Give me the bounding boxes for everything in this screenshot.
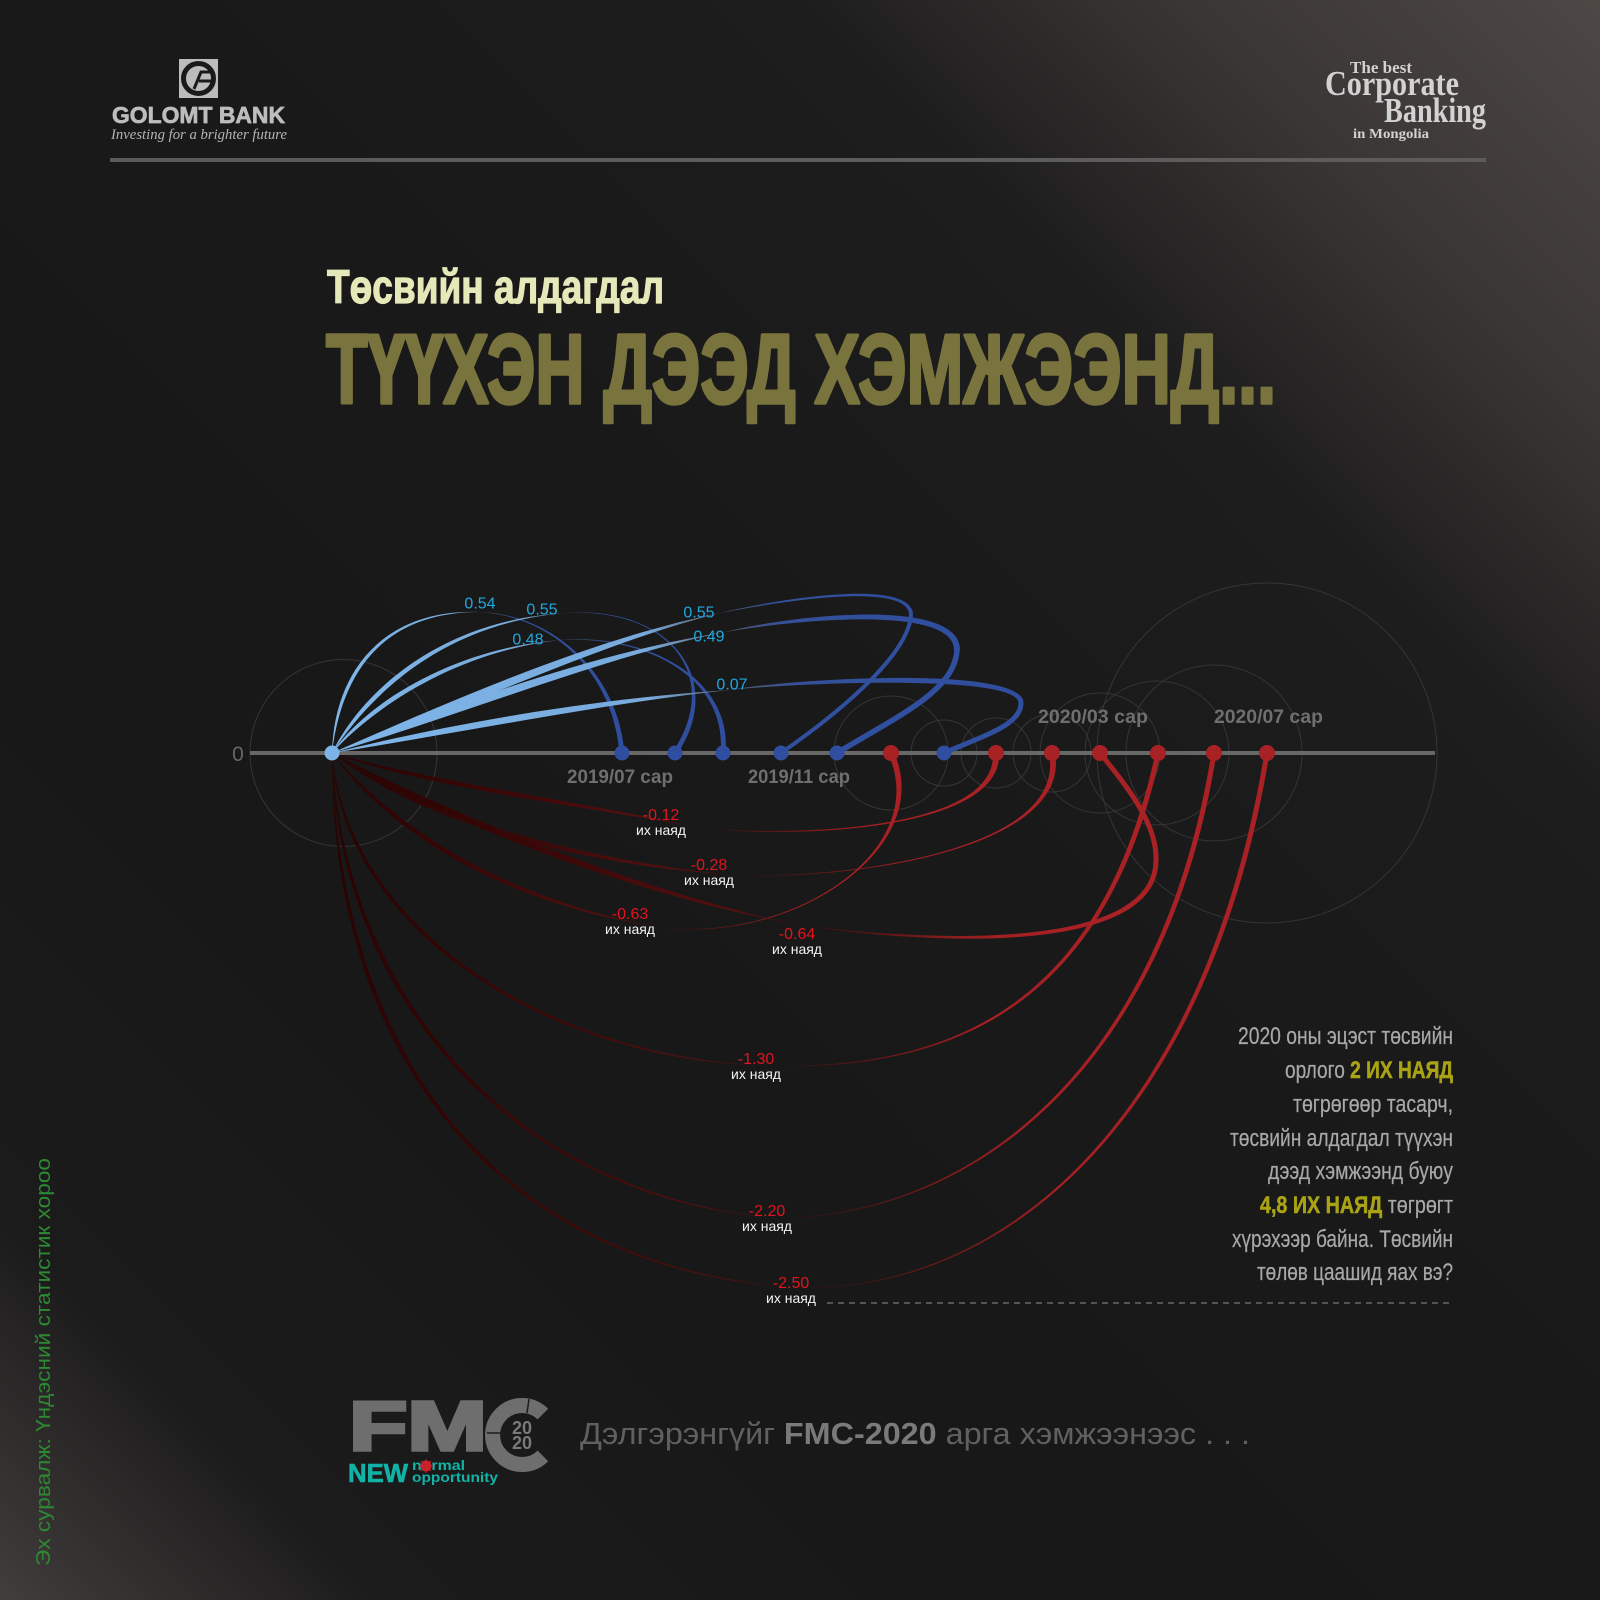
deficit value labels: -0.12	[643, 807, 679, 824]
subtitle: Төсвийн алдагдал	[327, 260, 664, 313]
deficit value labels: -0.63	[612, 906, 648, 923]
logo: FMC 2020	[348, 1387, 543, 1488]
deficit value labels: -0.64	[779, 926, 815, 943]
deficit month dots	[883, 745, 1275, 761]
deficit value labels: их наяд	[742, 1218, 792, 1234]
surplus value labels: 0.49	[693, 628, 725, 646]
date labels: 2020/07 сар	[1214, 707, 1323, 728]
date labels: 2019/11 сар	[748, 767, 850, 788]
origin dot	[324, 746, 340, 760]
commentary text block: төгрөгөөр тасарч,	[1293, 1091, 1453, 1118]
red arc -2.50	[332, 753, 1270, 1288]
red arc -0.12	[332, 753, 999, 832]
red arc -1.30	[332, 752, 1160, 1066]
year digits	[512, 1418, 532, 1453]
icon: Golomt G mark	[179, 59, 218, 98]
blue arc 0.54	[332, 612, 624, 753]
red arc -0.63	[332, 752, 902, 929]
logo: best corporate banking award: The best	[1350, 58, 1412, 77]
red arc -0.28	[332, 752, 1056, 876]
FM lettering: FM	[349, 1387, 487, 1465]
deficit value labels: их наяд	[772, 941, 822, 957]
deficit value labels: их наяд	[731, 1066, 781, 1082]
year digits: 20	[512, 1433, 532, 1453]
commentary text block	[1230, 1023, 1453, 1286]
date labels: 2019/07 сар	[567, 767, 673, 788]
deficit value labels	[605, 807, 822, 1306]
logo: best corporate banking award: Banking	[1384, 91, 1486, 130]
icon: C ring	[487, 1399, 543, 1464]
commentary text block: орлого 2 ИХ НАЯД	[1285, 1057, 1453, 1084]
red arc -2.20	[332, 753, 1216, 1218]
logo: best corporate banking award: in Mongolia	[1353, 126, 1429, 141]
deficit value labels: их наяд	[636, 822, 686, 838]
surplus value labels: 0.54	[464, 596, 496, 612]
NEW wordmark: NEW	[348, 1458, 408, 1488]
commentary text block: 4,8 ИХ НАЯД төгрөгт	[1260, 1192, 1453, 1219]
deficit value labels: -0.28	[691, 857, 727, 874]
deficit value labels: их наяд	[766, 1290, 816, 1306]
logo: best corporate banking award	[1325, 58, 1486, 141]
surplus value labels: 0.55	[683, 604, 715, 622]
deficit value labels: -1.30	[738, 1051, 774, 1068]
reference circles	[250, 583, 1437, 923]
opportunity wordmark: opportunity	[412, 1469, 498, 1485]
red arc -0.64	[332, 753, 1158, 939]
year digits: 20	[512, 1418, 532, 1438]
deficit value labels: -2.20	[749, 1203, 785, 1220]
surplus value labels: 0.07	[716, 676, 748, 694]
blue arc 0.48	[332, 639, 726, 753]
blue arc 0.49 loop	[332, 615, 960, 753]
footer call to action: Дэлгэрэнгүйг FMC-2020 арга хэмжээнээс . . .	[580, 1416, 1250, 1451]
surplus value labels	[464, 596, 748, 694]
date labels: 2020/03 сар	[1038, 707, 1148, 728]
logo: Golomt Bank	[110, 59, 288, 143]
deficit value labels: их наяд	[684, 872, 734, 888]
blue arc 0.07 loop	[332, 678, 1024, 753]
timeline axis	[250, 751, 1435, 755]
logo: best corporate banking award: Corporate	[1325, 64, 1459, 103]
blue arc 0.55	[332, 612, 696, 754]
date labels	[567, 707, 1323, 788]
surplus value labels: 0.55	[526, 602, 558, 618]
deficit value labels: -2.50	[773, 1275, 809, 1292]
normal wordmark: normal	[412, 1457, 465, 1473]
icon: virus	[419, 1459, 433, 1473]
commentary text block: хүрэхээр байна. Төсвийн	[1232, 1226, 1453, 1253]
blue arc 0.55 upper loop	[332, 594, 913, 753]
bank name: GOLOMT BANK	[112, 102, 285, 128]
commentary text block: төсвийн алдагдал түүхэн	[1230, 1125, 1453, 1152]
commentary text block: төлөв цаашид яах вэ?	[1257, 1259, 1453, 1286]
commentary text block: 2020 оны эцэст төсвийн	[1238, 1023, 1453, 1050]
chart: budget balance arcs	[232, 583, 1437, 1306]
source note: Эх сурвалж: Үндэсний статистик хороо	[33, 1158, 55, 1566]
surplus value labels: 0.48	[512, 632, 544, 648]
axis zero label: 0	[232, 743, 244, 766]
commentary text block: дээд хэмжээнд буюу	[1268, 1158, 1453, 1185]
surplus month dots	[614, 746, 952, 760]
deficit value labels: их наяд	[605, 921, 655, 937]
tagline: Investing for a brighter future	[110, 127, 288, 143]
